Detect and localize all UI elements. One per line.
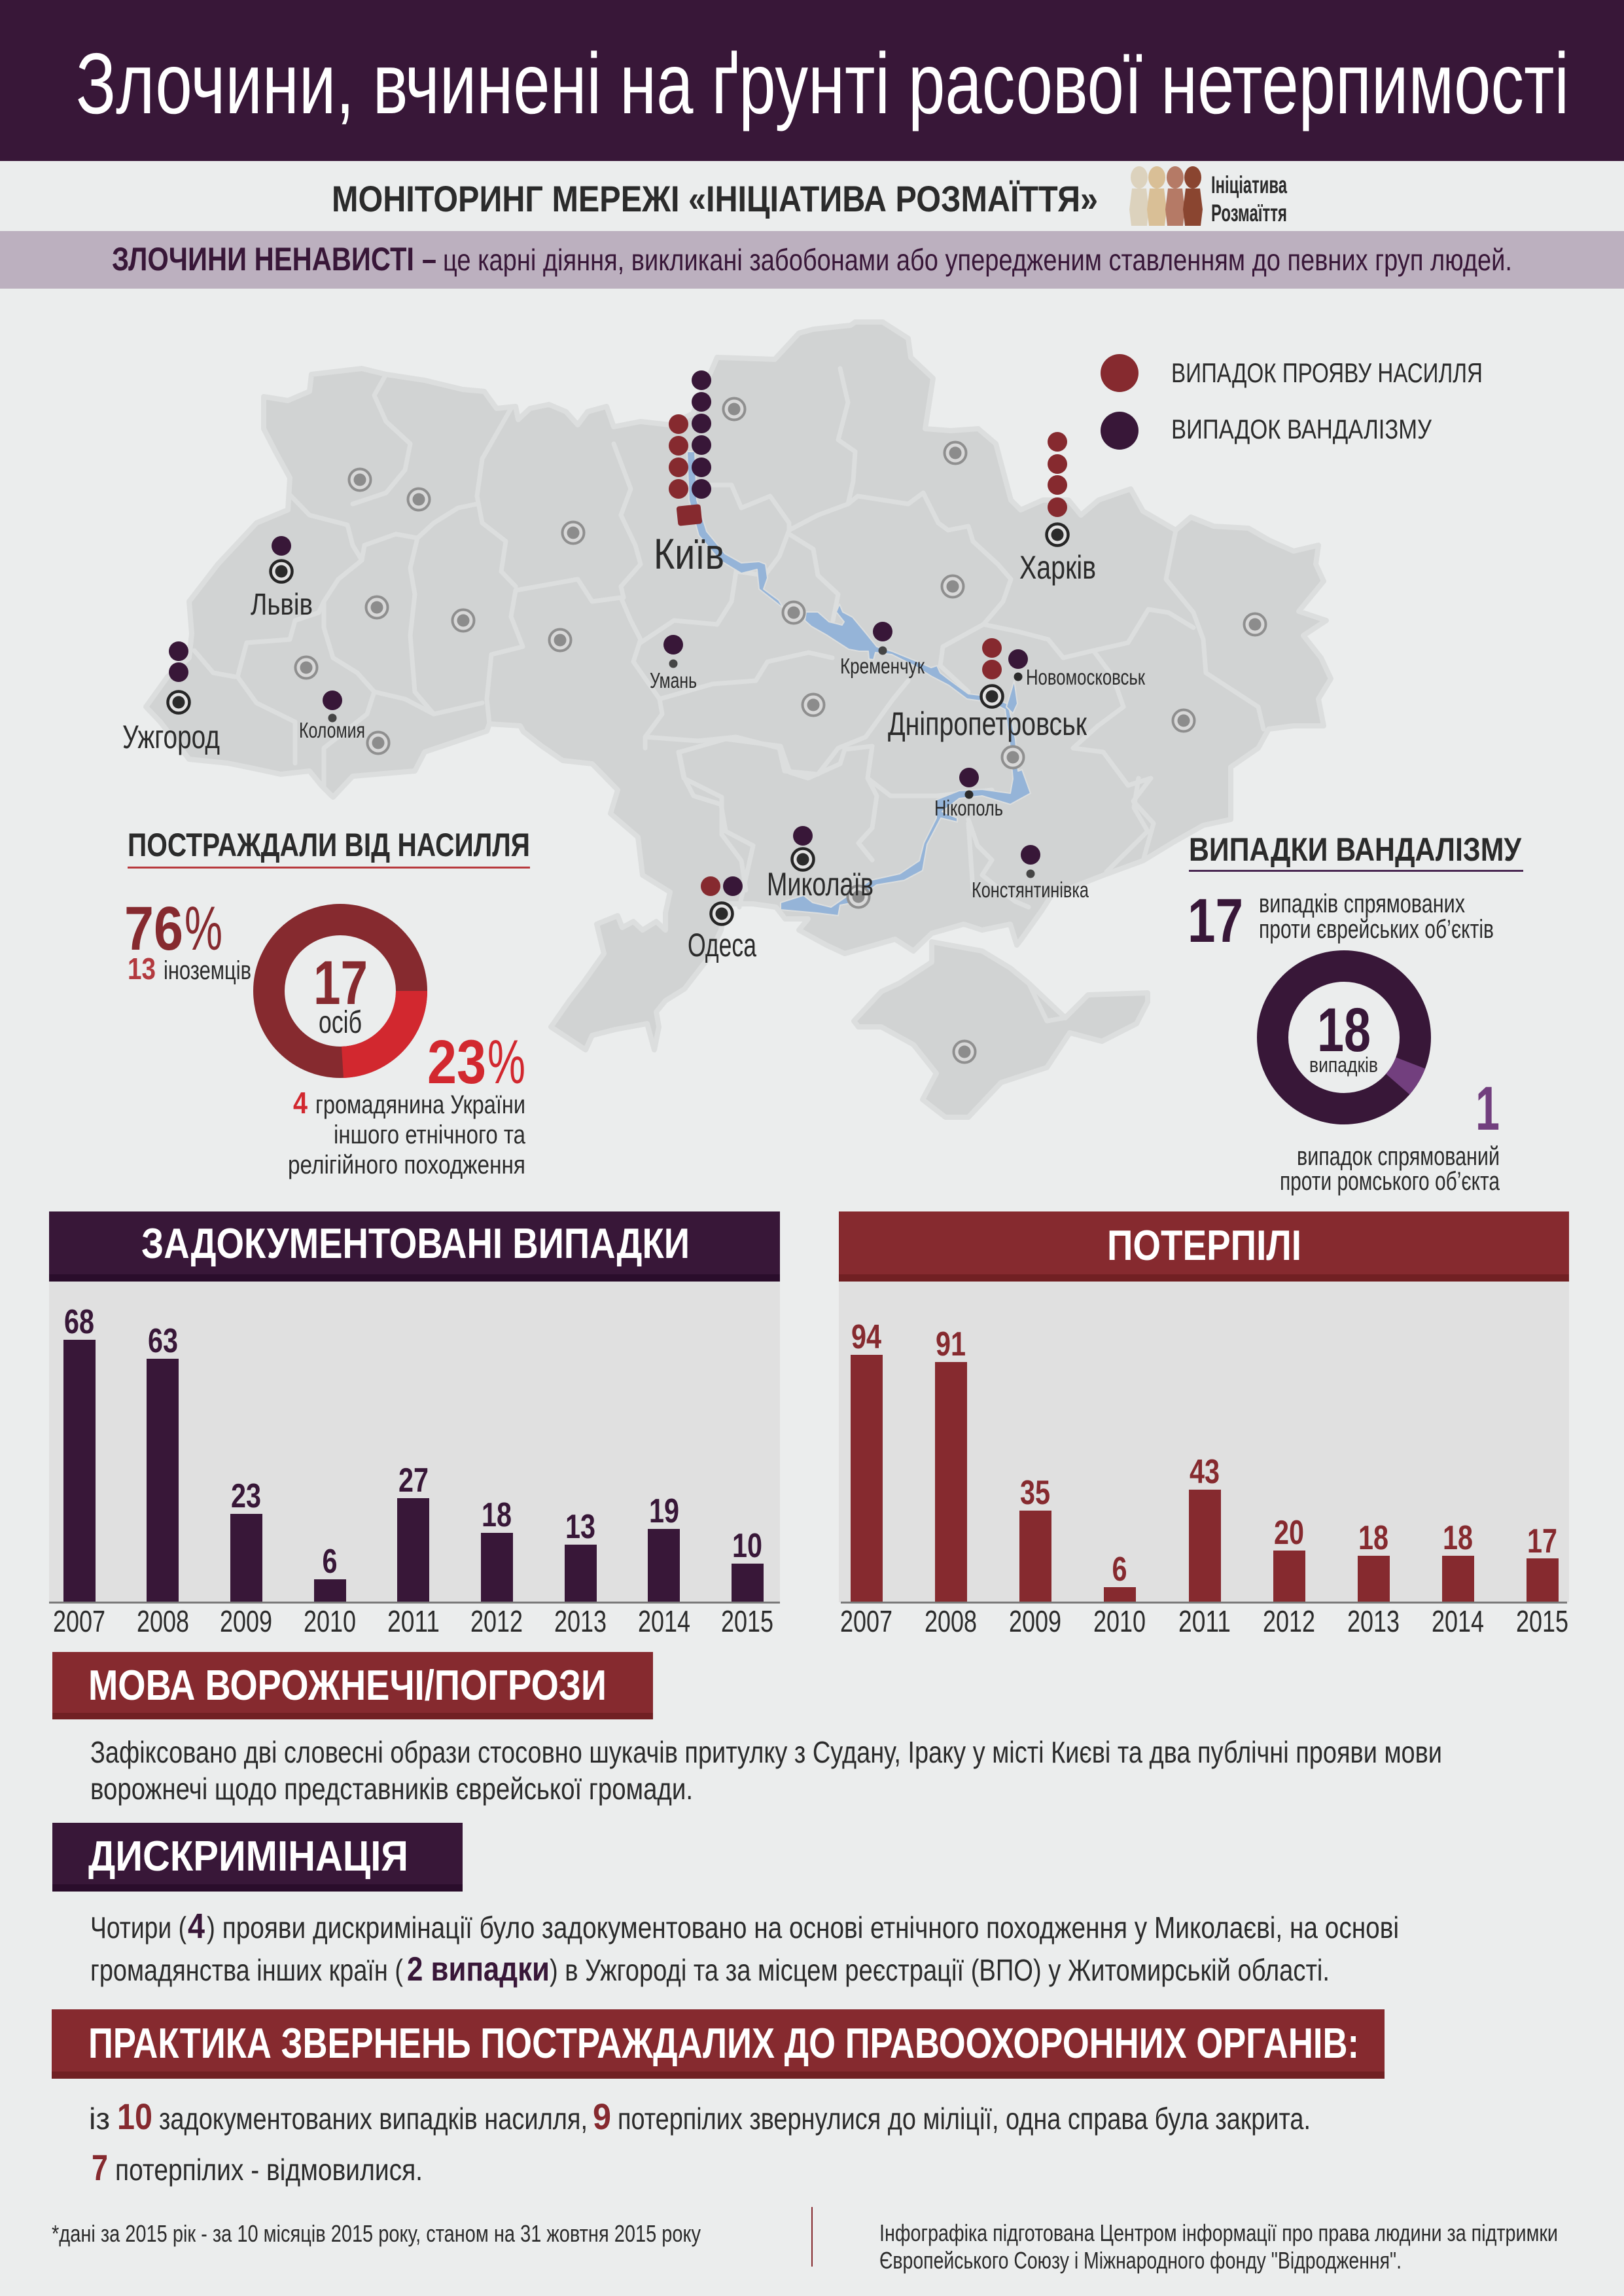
years axis: documented cases: 2015 [721, 1604, 773, 1638]
bar chart: documented cases [49, 1211, 780, 1638]
credits: Європейського Союзу і Міжнародного фонду "Відродження". [879, 2247, 1402, 2274]
text block: law enforcement: потерпілих звернулися до міліції, одна справа була закрита. [618, 2102, 1311, 2136]
text block: law enforcement [89, 2096, 1311, 2188]
text block: law enforcement: потерпілих - відмовилися. [115, 2153, 423, 2187]
stat: 23 percent citizens: релігійного походження [288, 1151, 525, 1179]
map of Ukraine [122, 322, 1331, 1117]
Nikopol marker: Нікополь [934, 796, 1003, 820]
years axis: documented cases: 2009 [220, 1604, 272, 1638]
section heading: hate speech: МОВА ВОРОЖНЕЧІ/ПОГРОЗИ [88, 1661, 607, 1709]
years axis: documented cases [53, 1604, 773, 1638]
footnote: *дані за 2015 рік - за 10 місяців 2015 року, станом на 31 жовтня 2015 року [52, 2220, 701, 2247]
text block: discrimination: 4 [188, 1907, 205, 1946]
years axis: victims: 2010 [1093, 1604, 1146, 1638]
stat: 76 percent foreigners: іноземців [164, 956, 251, 985]
Kyiv markers [654, 370, 724, 578]
Kostiantynivka marker [972, 845, 1089, 902]
stat: 23 percent citizens: % [487, 1028, 525, 1097]
Dnipropetrovsk and Novomoskovsk markers [888, 638, 1145, 742]
stat: 76 percent foreigners: % [185, 894, 222, 963]
values: victims: 6 [1112, 1551, 1127, 1588]
stat: 23 percent citizens: громадянина України [315, 1090, 525, 1119]
values: documented cases: 63 [148, 1322, 178, 1360]
definition band: – [422, 241, 436, 278]
Kharkiv markers [1019, 432, 1096, 586]
text block: hate speech [90, 1735, 1442, 1806]
years axis: victims: 2014 [1432, 1604, 1484, 1638]
oblast borders [194, 368, 1263, 1021]
donut chart: 17 persons: 17 [313, 948, 368, 1018]
years axis: documented cases: 2011 [387, 1604, 440, 1638]
chart header: victims [839, 1211, 1569, 1282]
years axis: documented cases: 2008 [137, 1604, 189, 1638]
Uzhhorod markers [122, 641, 220, 755]
bars: documented cases [63, 1340, 764, 1602]
definition band: ЗЛОЧИНИ НЕНАВИСТІ [112, 241, 414, 278]
stat: 76 percent foreigners: 13 [128, 952, 156, 986]
years axis: victims: 2013 [1347, 1604, 1400, 1638]
text block: law enforcement: 9 [593, 2096, 611, 2137]
Kremenchuk marker: Кременчук [840, 654, 925, 678]
stat: 1 case against Roma site: 1 [1475, 1074, 1500, 1143]
stat: 23 percent citizens: іншого етнічного та [334, 1121, 526, 1149]
values: victims: 91 [936, 1325, 966, 1363]
years axis: victims: 2012 [1263, 1604, 1315, 1638]
values: documented cases: 68 [64, 1303, 94, 1341]
river Dnipro [687, 452, 1031, 916]
stat: 1 case against Roma site [1280, 1074, 1500, 1196]
stat: 17 cases against Jewish sites [1188, 886, 1494, 956]
heading: vandalism: ВИПАДКИ ВАНДАЛІЗМУ [1189, 831, 1522, 868]
donut chart: 17 persons: осіб [319, 1005, 362, 1040]
text block: law enforcement: 7 [92, 2147, 108, 2188]
bars: victims [851, 1355, 1559, 1602]
definition band [0, 231, 1624, 289]
values: victims [851, 1318, 1557, 1588]
Odesa markers: Одеса [688, 927, 756, 963]
values: victims: 20 [1274, 1514, 1304, 1552]
Kolomyia marker: Коломия [299, 718, 365, 742]
chart header: victims: ПОТЕРПІЛІ [1107, 1221, 1301, 1269]
Dnipropetrovsk and Novomoskovsk markers: Новомосковськ [1026, 665, 1145, 689]
values: victims: 17 [1527, 1522, 1557, 1560]
values: documented cases: 23 [231, 1477, 261, 1515]
Mykolaiv markers: Миколаїв [767, 866, 874, 903]
Kyiv markers: Київ [654, 529, 724, 578]
values: documented cases: 13 [565, 1508, 595, 1546]
Kolomyia marker [299, 691, 365, 742]
section heading: discrimination [52, 1823, 463, 1892]
values: victims: 43 [1190, 1453, 1220, 1491]
years axis: victims: 2007 [840, 1604, 892, 1638]
text block: discrimination: громадянства інших країн ( [90, 1953, 404, 1987]
values: documented cases: 27 [398, 1462, 429, 1499]
Uman marker: Умань [650, 668, 697, 692]
stat: 76 percent foreigners: 76 [124, 894, 183, 963]
stat: 17 cases against Jewish sites: 17 [1188, 886, 1243, 956]
values: documented cases: 18 [482, 1496, 512, 1534]
text block: discrimination: ) прояви дискримінації було задокументовано на основі етнічного походження у Миколаєві, на основі [207, 1910, 1399, 1945]
section heading: law enforcement [52, 2009, 1385, 2079]
Odesa markers [688, 876, 756, 963]
text block: discrimination [90, 1907, 1399, 1988]
legend: ВИПАДОК ВАНДАЛІЗМУ [1171, 414, 1432, 444]
values: victims: 18 [1443, 1519, 1473, 1557]
bar chart: victims [839, 1211, 1569, 1638]
Kostiantynivka marker: Констянтинівка [972, 878, 1089, 902]
legend [1101, 354, 1483, 450]
Lviv markers: Львів [251, 587, 313, 621]
logo: Ініціатива Розмаїття: Ініціатива [1211, 171, 1287, 198]
oblast centre markers [296, 398, 1265, 1063]
stat: 1 case against Roma site: випадок спрямований [1297, 1142, 1500, 1171]
map outline [146, 322, 1331, 1117]
years axis: documented cases: 2012 [470, 1604, 523, 1638]
Uman marker [650, 635, 697, 692]
donut chart: 17 persons [269, 920, 427, 1078]
Lviv markers [251, 536, 313, 621]
title banner [0, 0, 1624, 161]
panel: victims of violence [124, 827, 530, 1179]
years axis: victims: 2011 [1178, 1604, 1231, 1638]
Dnipropetrovsk and Novomoskovsk markers: Дніпропетровськ [888, 706, 1087, 742]
years axis: victims [840, 1604, 1568, 1638]
heading: victims: ПОСТРАЖДАЛИ ВІД НАСИЛЛЯ [128, 827, 530, 863]
donut chart: 18 cases: 18 [1317, 996, 1371, 1065]
stat: 1 case against Roma site: проти ромського об’єкта [1280, 1167, 1500, 1196]
stat: 17 cases against Jewish sites: проти єврейських об’єктів [1259, 915, 1494, 944]
stat: 17 cases against Jewish sites: випадків спрямованих [1259, 889, 1465, 918]
Kremenchuk marker [840, 622, 925, 678]
chart header: documented cases [49, 1211, 780, 1282]
logo: Ініціатива Розмаїття [1129, 166, 1287, 226]
years axis: documented cases: 2010 [304, 1604, 356, 1638]
stat: 23 percent citizens [288, 1028, 526, 1179]
years axis: documented cases: 2007 [53, 1604, 105, 1638]
Mykolaiv markers [767, 826, 874, 903]
values: victims: 18 [1358, 1519, 1388, 1557]
section heading: hate speech [52, 1652, 653, 1719]
section heading: law enforcement: ПРАКТИКА ЗВЕРНЕНЬ ПОСТРАЖДАЛИХ ДО ПРАВООХОРОННИХ ОРГАНІВ: [88, 2019, 1359, 2067]
text block: law enforcement: задокументованих випадків насилля, [159, 2102, 588, 2136]
years axis: victims: 2015 [1516, 1604, 1568, 1638]
values: victims: 35 [1020, 1474, 1050, 1512]
values: documented cases: 6 [322, 1543, 338, 1581]
credits [879, 2219, 1558, 2274]
logo: Ініціатива Розмаїття: Розмаїття [1211, 200, 1287, 226]
text block: discrimination: ) в Ужгороді та за місцем реєстрації (ВПО) у Житомирській області. [550, 1953, 1330, 1987]
text block: law enforcement: 10 [117, 2096, 152, 2137]
stat: 23 percent citizens: 23 [427, 1028, 486, 1097]
years axis: documented cases: 2014 [638, 1604, 690, 1638]
legend: ВИПАДОК ПРОЯВУ НАСИЛЛЯ [1171, 357, 1483, 388]
values: victims: 94 [851, 1318, 881, 1356]
stat: 76 percent foreigners [124, 894, 251, 986]
years axis: victims: 2008 [925, 1604, 977, 1638]
subtitle: МОНІТОРИНГ МЕРЕЖІ «ІНІЦІАТИВА РОЗМАЇТТЯ» [332, 178, 1098, 219]
Kharkiv markers: Харків [1019, 549, 1096, 586]
section heading: discrimination: ДИСКРИМІНАЦІЯ [88, 1832, 408, 1880]
text block: hate speech: ворожнечі щодо представників єврейської громади. [90, 1772, 693, 1806]
years axis: documented cases: 2013 [554, 1604, 607, 1638]
text block: discrimination: Чотири ( [90, 1910, 187, 1945]
chart header: documented cases: ЗАДОКУМЕНТОВАНІ ВИПАДКИ [141, 1219, 690, 1267]
donut chart: 18 cases [1273, 966, 1425, 1109]
values: documented cases: 19 [649, 1492, 679, 1530]
values: documented cases: 10 [732, 1527, 762, 1565]
Uzhhorod markers: Ужгород [122, 719, 220, 755]
values: documented cases [64, 1303, 762, 1581]
text block: law enforcement: із [89, 2102, 110, 2136]
Nikopol marker [934, 768, 1003, 820]
stat: 23 percent citizens: 4 [293, 1086, 308, 1120]
panel: vandalism cases [1188, 831, 1523, 1196]
years axis: victims: 2009 [1009, 1604, 1061, 1638]
donut chart: 18 cases: випадків [1309, 1053, 1378, 1077]
text block: discrimination: 2 випадки [407, 1950, 550, 1988]
